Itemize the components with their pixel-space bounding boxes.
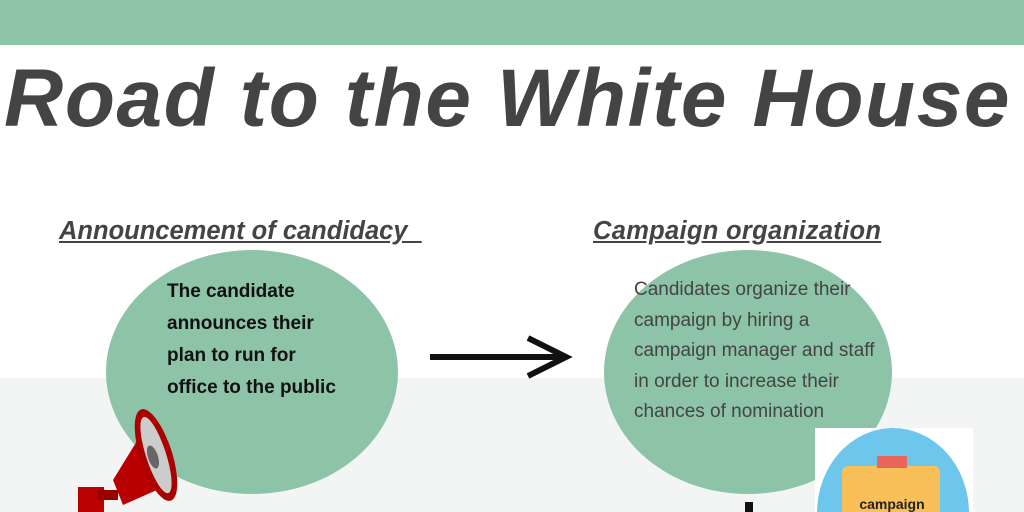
icon: megaphone <box>78 409 178 512</box>
arrow <box>430 335 573 379</box>
text: campaign: campaign by hiring a <box>634 310 809 330</box>
text: campaign <box>634 279 875 422</box>
text: campaign: Candidates organize their <box>634 279 851 300</box>
top band <box>0 0 1024 45</box>
icon: campaign briefcase: campaign <box>859 496 925 512</box>
text: announcement: announces their <box>167 313 314 334</box>
text: announcement: The candidate <box>167 281 295 302</box>
lower background panel <box>0 378 1024 512</box>
text: announcement: office to the public <box>167 377 336 398</box>
circle: announcement <box>106 250 398 494</box>
circle: campaign <box>604 250 892 494</box>
heading: announcement: Announcement of candidacy <box>59 217 408 245</box>
title: Road to the White House <box>4 53 1011 144</box>
text: announcement: plan to run for <box>167 345 296 366</box>
text: campaign: chances of nomination <box>634 401 824 422</box>
text: campaign: campaign manager and staff <box>634 340 874 361</box>
small dark mark <box>745 502 753 512</box>
icon: campaign briefcase <box>815 428 973 512</box>
text: campaign: in order to increase their <box>634 370 839 392</box>
heading: campaign organization: Campaign organization <box>593 217 881 245</box>
text: announcement <box>167 281 336 398</box>
